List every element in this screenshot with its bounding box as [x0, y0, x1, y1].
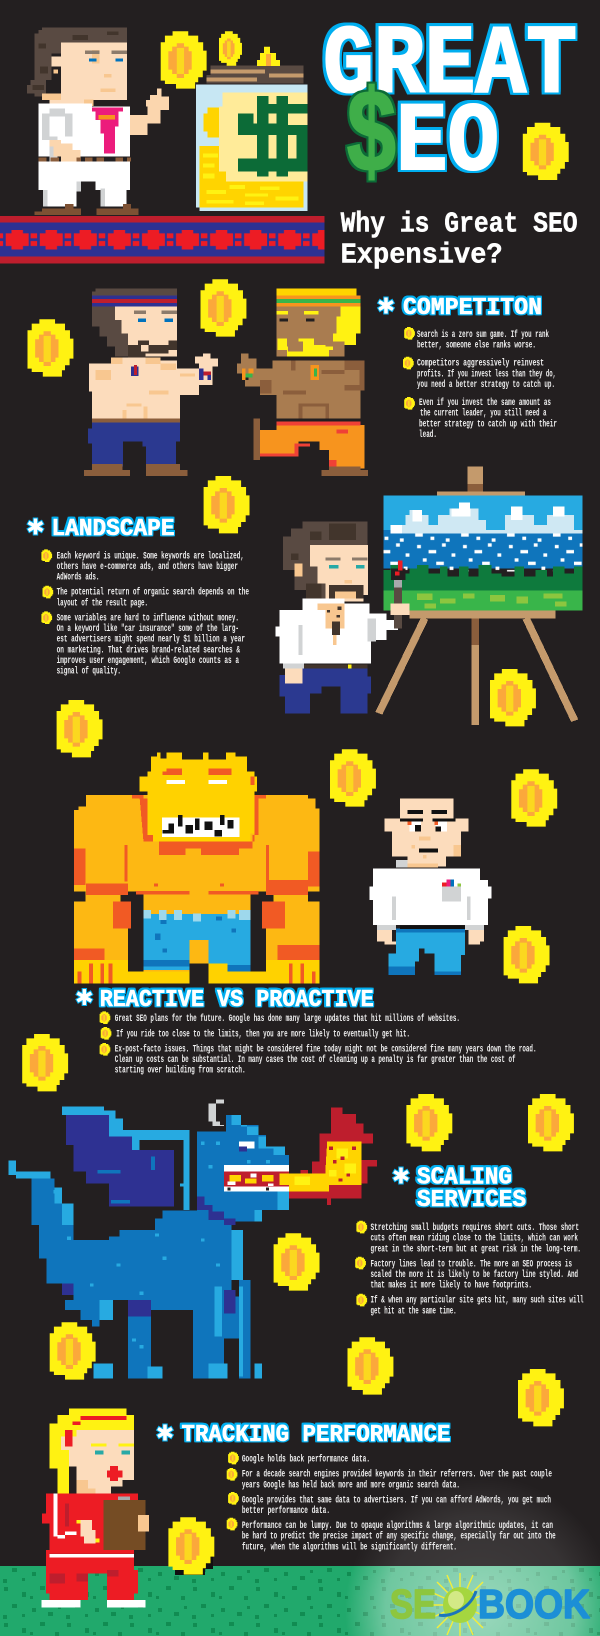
- scene: two fighters: [84, 288, 368, 476]
- platform: [0, 216, 324, 263]
- heading: scaling services: SERVICES: [417, 1187, 526, 1214]
- painter: [276, 522, 409, 713]
- bullet icons: [355, 1221, 367, 1306]
- scene: woman with clipboard: [41, 1408, 149, 1607]
- coins: scaling: [50, 1094, 574, 1426]
- coins: header: [161, 31, 569, 180]
- ground: [0, 1480, 600, 1636]
- section: tracking performance: [156, 1422, 556, 1553]
- subtitle: [341, 208, 578, 271]
- logo globe: O: [444, 1581, 476, 1627]
- scene: painter and easel: [276, 467, 582, 725]
- text block: future, when the algorithms will be significantly different.: [242, 1541, 457, 1553]
- section: reactive vs proactive: [75, 986, 537, 1077]
- jar of coins: [196, 66, 307, 211]
- heading: landscape: LANDSCAPE: [52, 516, 174, 543]
- heading: tracking performance: ✱: [156, 1422, 174, 1446]
- dragon body: [8, 1099, 289, 1378]
- heading: reactive vs proactive: ✱: [75, 986, 94, 1011]
- bullet icons: [100, 1011, 111, 1056]
- bullet icons: [41, 549, 53, 624]
- heading: competition: COMPETITON: [403, 295, 542, 322]
- text block: lead.: [419, 429, 437, 441]
- text block: AdWords ads.: [57, 572, 100, 584]
- section: scaling services: [355, 1164, 584, 1317]
- section: competition: [377, 294, 557, 441]
- text block: others have e-commerce ads, and others have bigger: [57, 561, 238, 573]
- logo wordmark BOOK: BOOK: [478, 1581, 590, 1627]
- dragon wing: [62, 1107, 189, 1210]
- text block: signal of quality.: [57, 666, 121, 678]
- coins: landscape: [57, 476, 536, 757]
- coins: competition: [28, 279, 246, 377]
- text block: improves user engagement, which Google counts as a: [57, 655, 239, 667]
- bullet icons: [227, 1452, 239, 1530]
- text block: years Google has held back more and more organic search data.: [242, 1479, 460, 1491]
- fire breath: [224, 1107, 377, 1205]
- text block: Each keyword is unique. Some keywords are localized,: [57, 550, 244, 562]
- text block: [417, 329, 557, 441]
- text block: est advertisers might spend nearly $1 billion a year: [57, 634, 245, 646]
- text block: layout of the result page.: [57, 597, 148, 609]
- heading: competition: ✱: [377, 294, 395, 320]
- coins: reactive: [22, 749, 557, 1091]
- fighter two: [237, 288, 368, 476]
- coin with shadow: [168, 1517, 214, 1575]
- office man: [369, 798, 492, 975]
- subtitle: Expensive?: [341, 238, 503, 271]
- text block: On a keyword like "car insurance" some of the larg-: [57, 623, 239, 635]
- heading: tracking performance: TRACKING PERFORMANCE: [182, 1422, 450, 1449]
- painting: [383, 495, 582, 611]
- text block: [370, 1222, 584, 1317]
- section: landscape: [26, 516, 249, 678]
- heading: scaling services: [392, 1164, 526, 1214]
- logo rays: [428, 1573, 492, 1636]
- text block: [57, 550, 249, 678]
- title: EO: EO: [396, 89, 499, 199]
- heading: scaling services: ✱: [392, 1164, 410, 1190]
- heading: landscape: ✱: [26, 516, 45, 540]
- heading: reactive vs proactive: REACTIVE VS PROACTIVE: [100, 987, 374, 1014]
- text block: better performance data.: [242, 1505, 330, 1517]
- easel: [379, 467, 575, 725]
- text block: on marketing. That drives brand-related searches &: [57, 644, 240, 656]
- scene: man with coin jar on platform: [0, 27, 324, 263]
- text block: [115, 1013, 537, 1077]
- heading: scaling services: SCALING: [417, 1164, 512, 1192]
- text block: The potential return of organic search depends on the: [57, 587, 249, 599]
- orange monster: [74, 753, 320, 983]
- text block: get hit at the same time.: [370, 1305, 457, 1317]
- text block: Google holds back performance data.: [242, 1453, 370, 1465]
- man in white suit: [27, 27, 169, 215]
- bullet icons: [403, 327, 415, 410]
- text block: [242, 1453, 556, 1553]
- scene: monster and office man: [74, 753, 492, 983]
- title: $ sign: $: [345, 73, 398, 205]
- text block: starting over building from scratch.: [115, 1065, 246, 1077]
- logo wordmark SE: SE: [390, 1581, 436, 1627]
- text block: Some variables are hard to influence without money.: [57, 612, 239, 624]
- scene: dragon breathing fire: [8, 1099, 377, 1378]
- logo: SEO Book: [390, 1573, 590, 1636]
- fighter one: [84, 288, 218, 476]
